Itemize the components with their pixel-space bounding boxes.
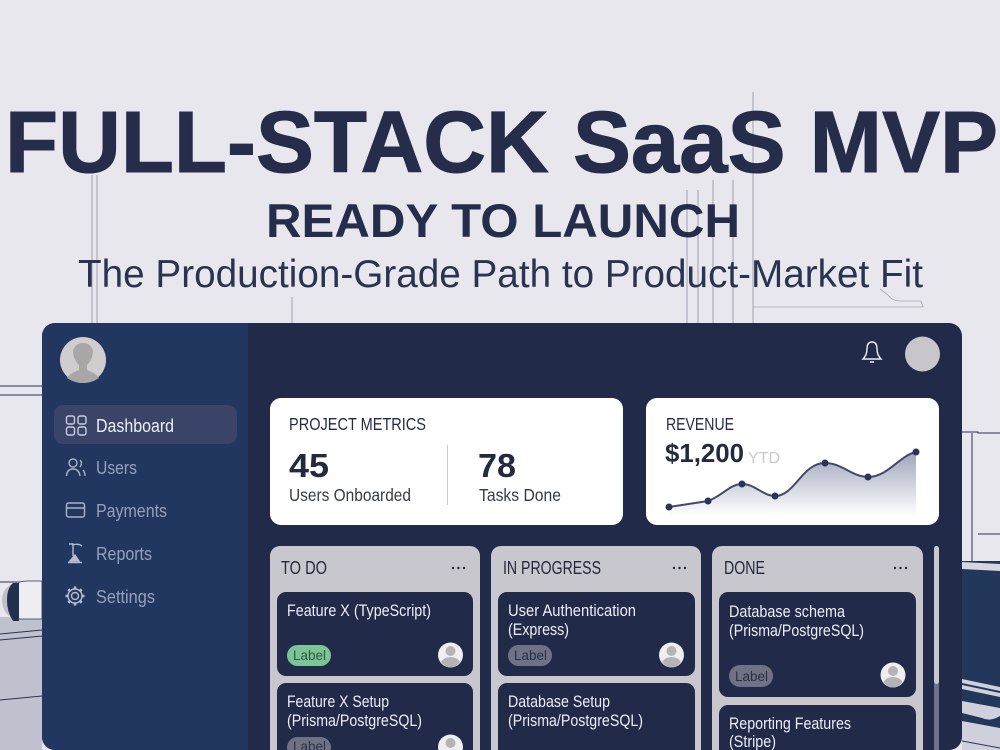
card: Reporting Features (719, 705, 916, 750)
column menu dots (894, 567, 907, 569)
column: to do (270, 546, 480, 750)
column heading: DONE (724, 558, 765, 578)
scrollbar (934, 546, 939, 750)
column: done (712, 546, 923, 750)
subtitle: ready to launch: READY TO LAUNCH (266, 194, 740, 247)
metric: users onboarded: Users Onboarded (289, 485, 411, 505)
heading: project metrics: PROJECT METRICS (289, 414, 426, 434)
icon: notification bell (863, 342, 881, 362)
panel: project metrics (270, 398, 623, 525)
card: Database Setup: Database Setup (508, 693, 610, 711)
left background scenery (0, 581, 42, 750)
column menu dots (452, 567, 465, 569)
column menu dots (673, 567, 686, 569)
panel: revenue (646, 398, 939, 525)
metric: users onboarded: 45 (289, 447, 329, 484)
menu: Payments: Payments (96, 501, 167, 521)
card: Feature X Setup (277, 683, 473, 750)
card: Database Setup: (Prisma/PostgreSQL) (508, 712, 643, 730)
revenue line chart (666, 448, 920, 516)
column heading: IN PROGRESS (503, 558, 601, 578)
metric: tasks done: Tasks Done (479, 485, 561, 505)
icon: users (66, 459, 85, 476)
top-right avatar (905, 336, 940, 372)
main dashboard area (42, 323, 962, 750)
metric: users onboarded (290, 454, 410, 501)
card: User Authentication: Label (514, 647, 547, 663)
card: User Authentication: User Authentication (508, 602, 636, 620)
card: Database Setup (498, 683, 695, 750)
menu: Dashboard: Dashboard (96, 416, 174, 436)
metric: tasks done (479, 454, 560, 501)
card: Feature X (TypeScript): Feature X (TypeScript) (287, 602, 431, 620)
icon: settings (66, 586, 84, 606)
sidebar avatar (60, 337, 106, 383)
active menu highlight (54, 405, 237, 444)
card: Feature X Setup: (Prisma/PostgreSQL) (287, 712, 422, 730)
card: Feature X (TypeScript): Label (293, 647, 326, 663)
card: Feature X Setup: Feature X Setup (287, 693, 389, 711)
card: User Authentication: (Express) (508, 621, 569, 639)
icon: reports (68, 544, 82, 562)
title: FULL-STACK SaaS MVP (5, 94, 998, 191)
menu: Users: Users (96, 458, 137, 478)
background line art (0, 92, 1000, 582)
card: User Authentication (498, 592, 695, 676)
right background scenery (962, 561, 1000, 750)
metric: tasks done: 78 (478, 447, 516, 484)
menu: Reports: Reports (96, 544, 152, 564)
icon: dashboard (66, 416, 86, 435)
YTD label: YTD (748, 450, 780, 467)
card: Database schema: Database schema (729, 603, 846, 621)
card: Reporting Features: Reporting Features (729, 715, 851, 733)
card: Database schema: (Prisma/PostgreSQL) (729, 622, 864, 640)
card: Feature X (TypeScript) (277, 592, 473, 676)
card: Database schema: Label (735, 668, 768, 684)
card: Database schema (719, 592, 916, 697)
sidebar (42, 323, 248, 750)
dashboard panel (42, 323, 962, 750)
column heading: TO DO (281, 558, 327, 578)
icon: payments (66, 503, 84, 517)
heading: revenue: REVENUE (666, 414, 734, 434)
menu: Settings: Settings (96, 587, 155, 607)
revenue value: $1,200 (665, 438, 744, 468)
tagline: The Production-Grade Path to Product-Market Fit (78, 253, 923, 296)
column: in progress (491, 546, 701, 750)
